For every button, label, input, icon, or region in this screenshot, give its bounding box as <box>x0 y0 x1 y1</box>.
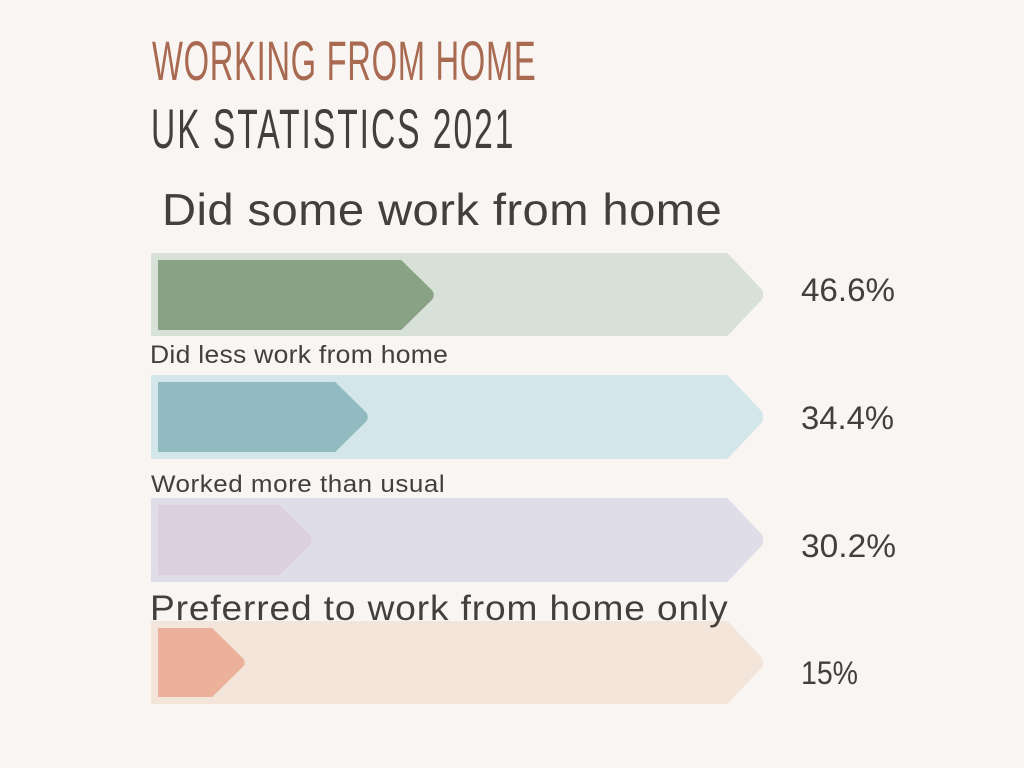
bar: worked more than usual 30.2% <box>152 499 896 581</box>
label: preferred to work from home only: Preferred to work from home only <box>150 588 728 628</box>
subtitle: UK statistics 2021: UK STATISTICS 2021 <box>151 97 513 160</box>
bar fill <box>158 382 367 452</box>
bar track <box>152 376 762 458</box>
label: worked more than usual: Worked more than usual <box>151 471 445 498</box>
bar track <box>152 254 762 335</box>
bar: preferred to work from home only 15% <box>152 622 858 703</box>
label: did less work from home: Did less work from home <box>150 342 448 369</box>
heading: did some work from home: Did some work from home <box>162 184 722 235</box>
bar fill <box>158 628 244 696</box>
bar: did less work from home 34.4% <box>152 376 894 458</box>
value: 15% <box>801 655 858 691</box>
bar fill <box>158 506 311 574</box>
bar fill <box>158 260 433 330</box>
value: 34.4% <box>801 400 894 436</box>
bar track <box>152 499 762 581</box>
value: 46.6% <box>801 272 895 308</box>
bar: did some work from home 46.6% <box>152 254 895 335</box>
bar track <box>152 622 762 703</box>
value: 30.2% <box>801 528 896 564</box>
title: working from home: WORKING FROM HOME <box>152 29 536 92</box>
